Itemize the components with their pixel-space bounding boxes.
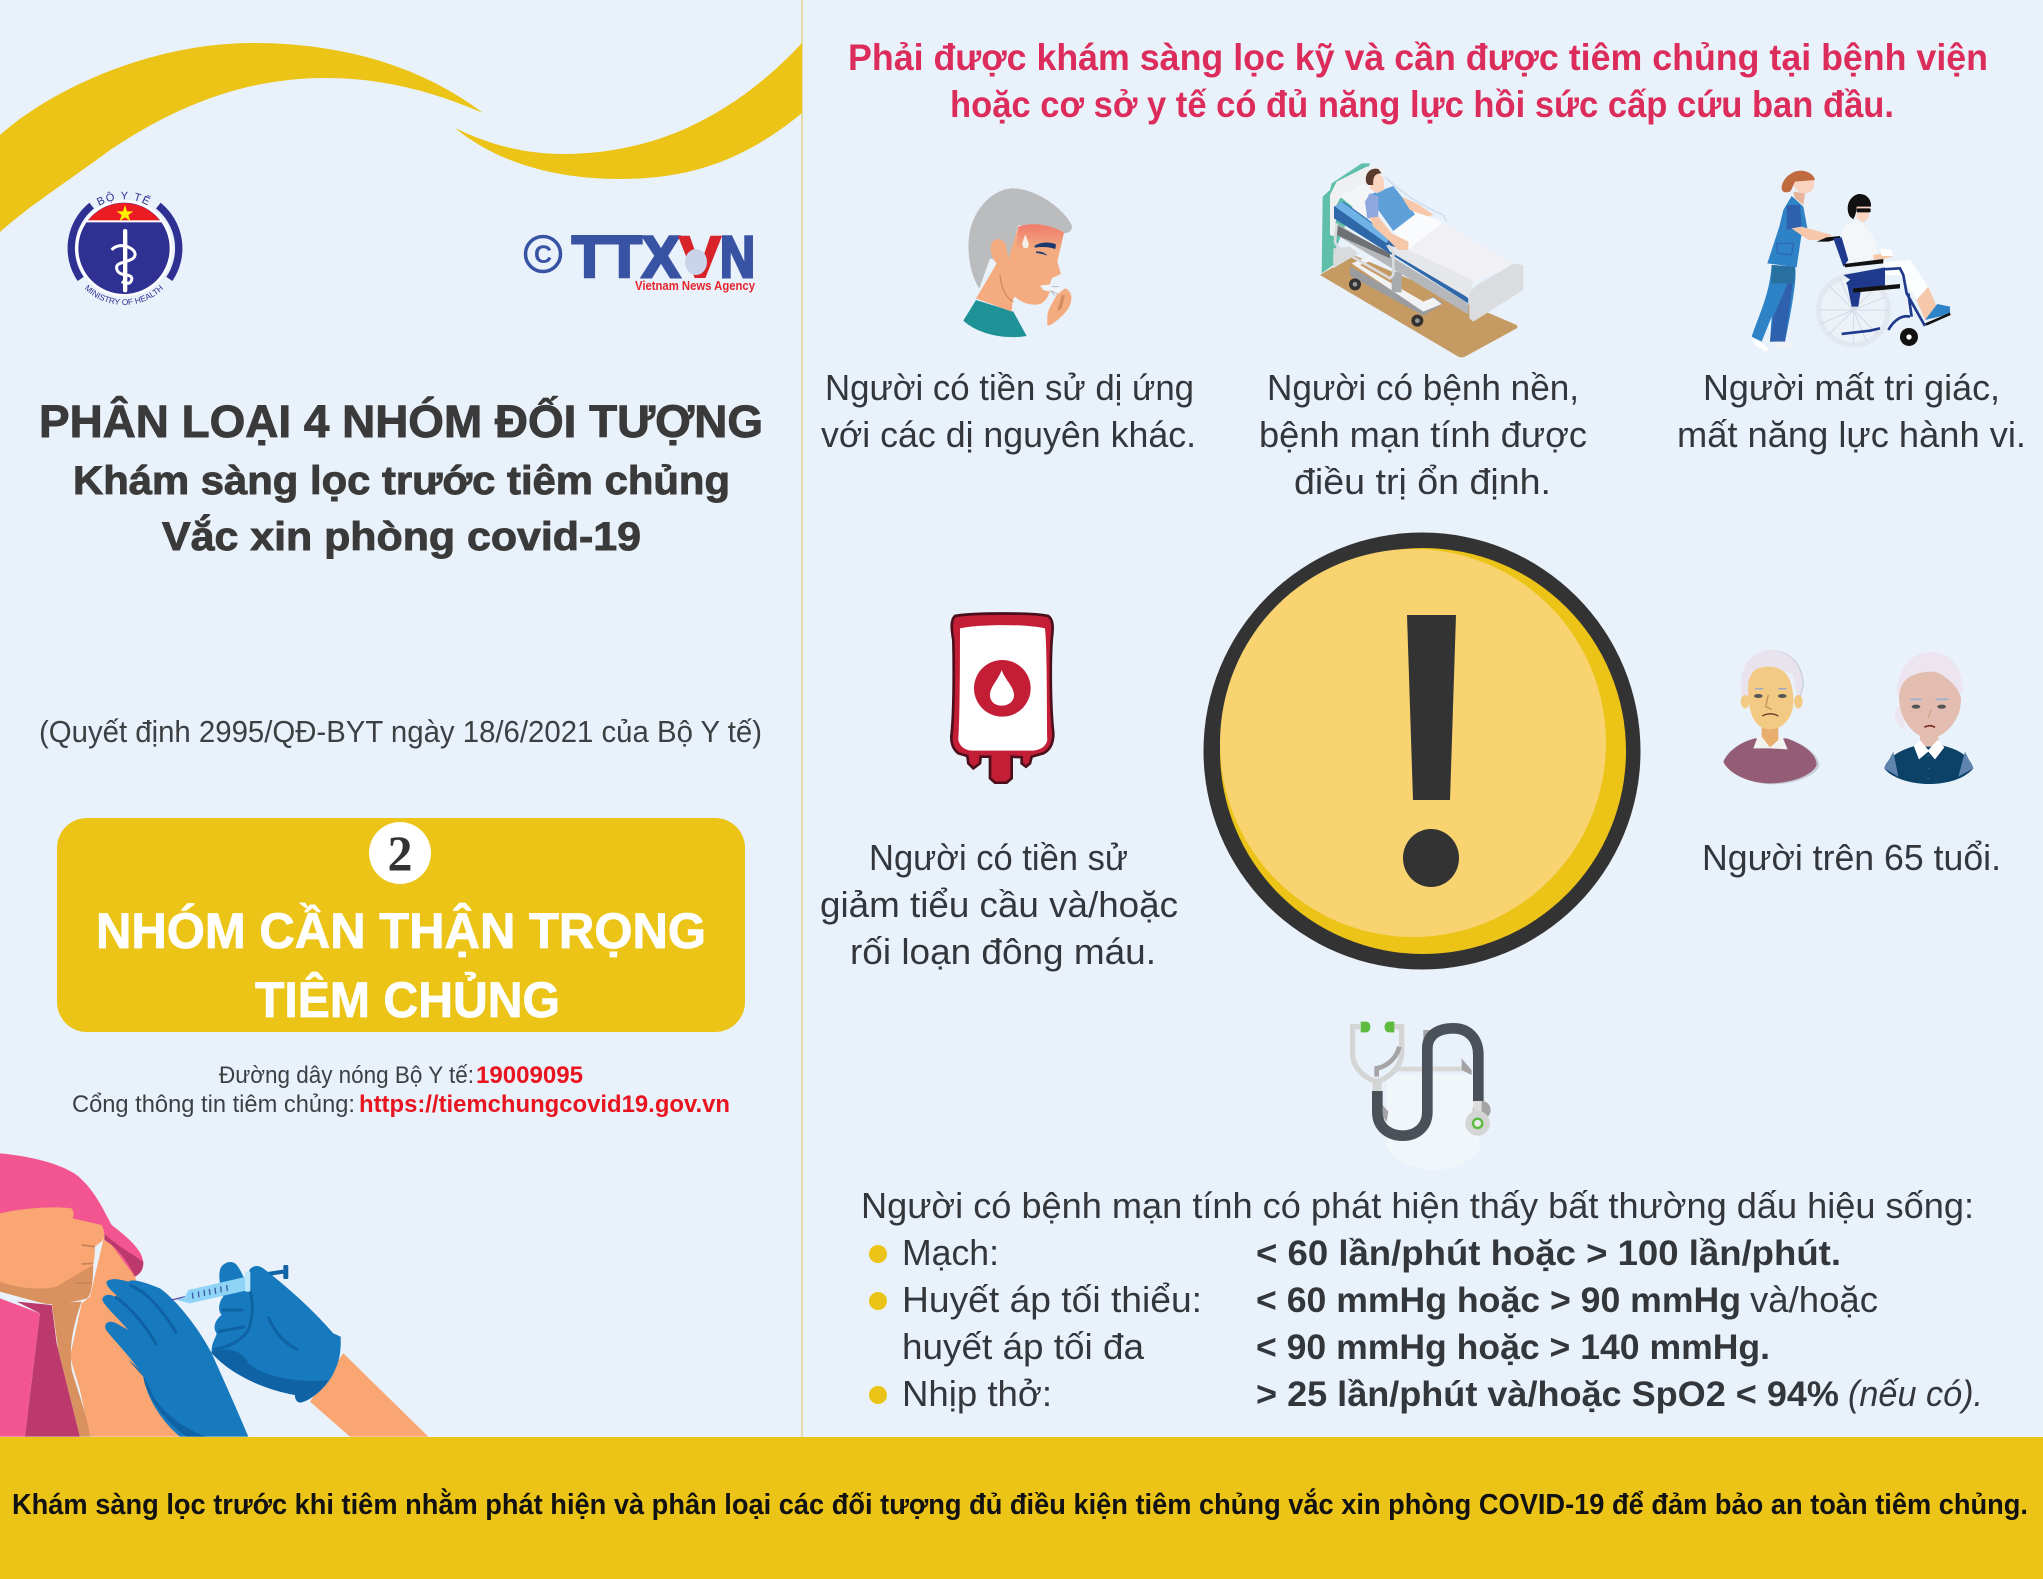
caption: bleeding disorders: giảm tiểu cầu và/hoặc [820, 884, 1178, 925]
heading: screening requirement: Phải được khám sàng lọc kỹ và cần được tiêm chủng tại bệnh viện [848, 37, 1988, 78]
caption: bleeding disorders: Người có tiền sử [869, 837, 1128, 878]
row: breathing rate: Nhịp thở: [902, 1373, 1052, 1414]
hotline and portal: Đường dây nóng Bộ Y tế: [219, 1062, 474, 1089]
caption: chronic disease: bệnh mạn tính được [1259, 414, 1587, 455]
row: blood pressure: < 90 mmHg hoặc > 140 mmHg. [1256, 1328, 1770, 1367]
icon: elderly people [1723, 650, 1973, 784]
logo: TTXVN: V [679, 225, 721, 290]
illustration: vaccination [0, 1153, 428, 1437]
logo: TTXVN: TTX [572, 225, 680, 290]
elderly man [1723, 650, 1819, 784]
logo: Ministry of Health: BỘ Y TẾ [96, 192, 152, 206]
row: breathing rate [869, 1373, 1983, 1414]
icon: patient in hospital bed [1320, 163, 1523, 357]
row: pulse: < 60 lần/phút hoặc > 100 lần/phút. [1256, 1234, 1841, 1273]
icon: blood bag [951, 613, 1053, 783]
row: blood pressure: Huyết áp tối thiểu: [902, 1279, 1202, 1320]
caption: bleeding disorders [820, 837, 1178, 972]
caption: loss of consciousness: mất năng lực hành vi. [1677, 414, 2026, 455]
text block: vital signs [861, 1185, 1983, 1414]
logo: TTXVN: C [534, 241, 552, 269]
logo: TTXVN: N [720, 225, 755, 290]
icon: stethoscope [1353, 1022, 1491, 1170]
logo: TTXVN: Vietnam News Agency [635, 279, 755, 293]
group badge: TIÊM CHỦNG [255, 971, 560, 1028]
caption: chronic disease: Người có bệnh nền, [1267, 367, 1579, 408]
caption: loss of consciousness [1677, 367, 2026, 455]
caption: allergy [821, 367, 1196, 455]
heading: screening requirement: hoặc cơ sở y tế có đủ năng lực hồi sức cấp cứu ban đầu. [950, 84, 1894, 125]
hotline and portal: https://tiemchungcovid19.gov.vn [359, 1091, 730, 1118]
icon: warning sign [1204, 532, 1640, 970]
caption: chronic disease [1259, 367, 1587, 502]
vital signs intro: Người có bệnh mạn tính có phát hiện thấy bất thường dấu hiệu sống: [861, 1185, 1974, 1226]
row: blood pressure [869, 1279, 1878, 1367]
title: Vắc xin phòng covid-19 [162, 513, 641, 559]
caption: allergy: Người có tiền sử dị ứng [825, 367, 1194, 408]
decision reference: (Quyết định 2995/QĐ-BYT ngày 18/6/2021 của Bộ Y tế) [39, 714, 762, 749]
row: blood pressure: và/hoặc [1750, 1279, 1878, 1320]
caption: loss of consciousness: Người mất tri giác, [1703, 367, 2000, 408]
group badge: 2 [388, 825, 412, 881]
caption: chronic disease: điều trị ổn định. [1294, 461, 1551, 502]
caption: over 65: Người trên 65 tuổi. [1702, 837, 2001, 878]
row: blood pressure: < 60 mmHg hoặc > 90 mmHg [1256, 1281, 1741, 1320]
logo: TTXVN [526, 225, 755, 293]
icon: person coughing [963, 188, 1072, 337]
heading: screening requirement [848, 37, 1988, 125]
caption: bleeding disorders: rối loạn đông máu. [850, 931, 1156, 972]
hotline and portal: Cổng thông tin tiêm chủng: [72, 1091, 355, 1118]
logo: Ministry of Health: MINISTRY OF HEALTH [84, 284, 164, 305]
title: Khám sàng lọc trước tiêm chủng [73, 459, 730, 503]
row: pulse [869, 1232, 1841, 1273]
icon: nurse pushing wheelchair [1752, 171, 1951, 352]
elderly woman [1884, 652, 1973, 784]
title: PHÂN LOẠI 4 NHÓM ĐỐI TƯỢNG [39, 396, 763, 447]
logo: Ministry of Health [68, 192, 182, 305]
group badge: NHÓM CẦN THẬN TRỌNG [96, 903, 706, 959]
hotline and portal [72, 1062, 730, 1118]
decorative yellow wave [0, 43, 802, 232]
row: breathing rate: > 25 lần/phút và/hoặc SpO2 < 94% [1256, 1375, 1839, 1414]
bottom banner [0, 1437, 2043, 1579]
row: blood pressure: huyết áp tối đa [902, 1326, 1145, 1367]
row: breathing rate: (nếu có). [1848, 1373, 1983, 1414]
title [39, 396, 763, 559]
row: pulse: Mạch: [902, 1232, 999, 1273]
hotline and portal: 19009095 [476, 1062, 583, 1089]
group badge [57, 818, 745, 1032]
caption: allergy: với các dị nguyên khác. [821, 414, 1196, 455]
